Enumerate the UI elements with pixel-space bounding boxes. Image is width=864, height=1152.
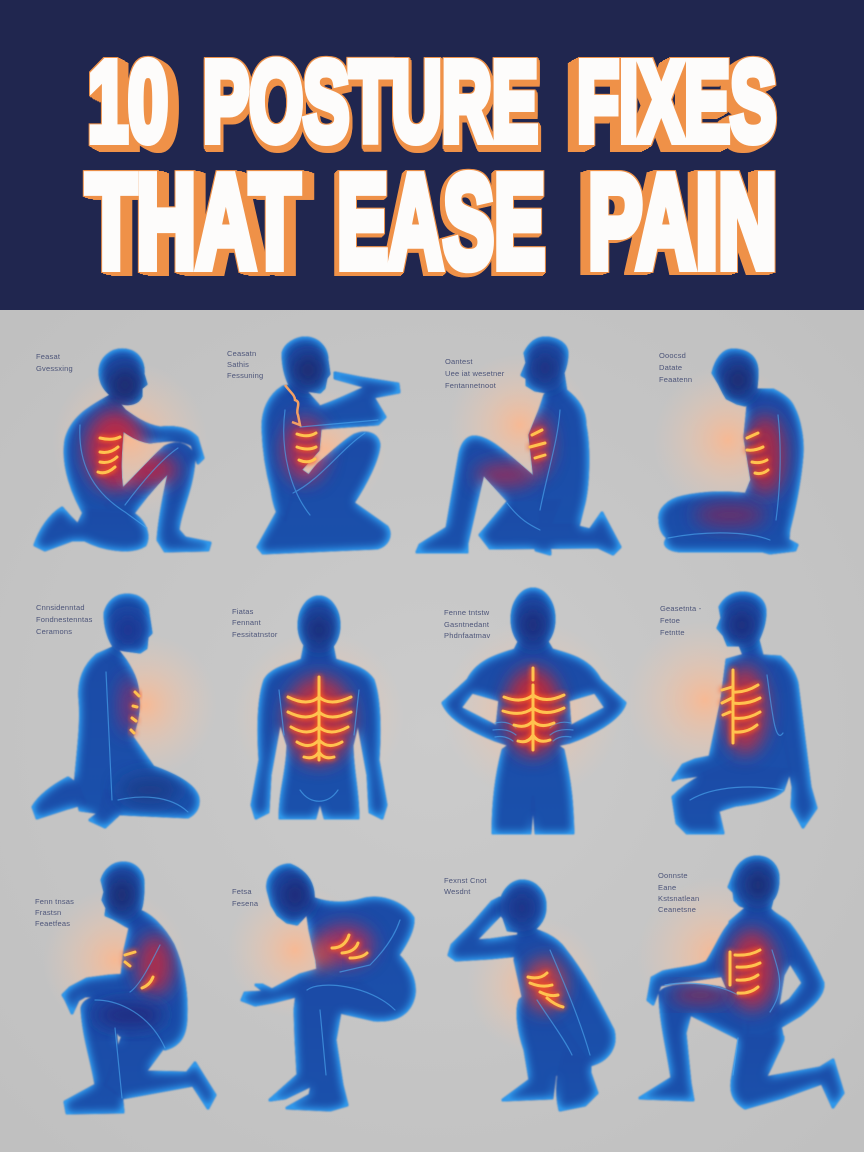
figure 9: lunging, hand on knee [35,863,215,1113]
body 9 [63,863,215,1113]
glow 6 [234,630,404,800]
title: POSTURE [203,38,538,164]
glow 10 [227,882,363,1018]
body 3 [417,338,620,554]
label 12: Ceanetsne [658,905,696,914]
figure 8: seated, three-quarter view [625,593,816,833]
label 8: Fetntte [660,628,685,637]
figure 5: kneeling, side view [33,595,217,827]
body 11 [449,881,614,1110]
glow 3 [448,353,592,497]
glow 5 [73,633,217,777]
limb lines 6 [279,690,359,801]
label 12: Eane [658,883,676,892]
label 8: Fetoe [660,616,680,625]
shading 9 [95,875,173,1027]
shading 12 [670,867,776,1010]
label 3: Oantest [445,357,473,366]
label 3: Uee iat wesetner [445,369,505,378]
label 8: Geasetnta - [660,604,701,613]
label 4: Ooocsd [659,351,686,360]
header band [0,0,864,310]
label 5: Ceramons [36,627,72,636]
glow 1 [52,362,208,518]
title [86,38,777,295]
label 10: Fesena [232,899,259,908]
shading 11 [508,890,565,1011]
ribs 3 [530,430,545,458]
title: 10 [88,38,168,164]
body 6 [252,597,386,818]
label 9: Feaetfeas [35,919,70,928]
limb lines 4 [668,415,780,540]
label 5: Fondnestenntas [36,615,93,624]
body 2 [258,338,399,553]
shading 3 [475,350,560,487]
body 10 [242,865,414,1110]
title: EASE [337,148,545,295]
label 2: Sathis [227,360,249,369]
ribs 1 [98,437,120,473]
glow 2 [263,388,387,512]
ribs 5 [131,692,139,733]
limb lines 12 [665,950,780,1075]
label 6: Fennant [232,618,262,627]
glow 12 [637,877,793,1033]
label 3: Fentannetnoot [445,381,497,390]
body 7 [443,589,625,833]
label 9: Frastsn [35,908,61,917]
lower panel background [0,310,864,1152]
ribs 10 [332,935,367,958]
figure 7: standing, hands on hips [443,589,625,833]
label 6: Fiatas [232,607,254,616]
label 2: Fessuning [227,371,263,380]
figure 4: seated, head bowed [653,350,803,553]
label 5: Cnnsidenntad [36,603,85,612]
ribs 4 [747,433,768,474]
figure 11: crouching, hand to head [444,876,614,1110]
label 1: Feasat [36,352,60,361]
ribs 7 [503,668,564,750]
body 12 [640,857,843,1108]
label 11: Wesdnt [444,887,471,896]
ribs 11 [528,973,563,1007]
body 5 [33,595,198,827]
limb lines 9 [95,945,165,1098]
label 12: Kstsnatlean [658,894,699,903]
ribs 9 [125,952,153,988]
label 2: Ceasatn [227,349,256,358]
figure 6: standing, front view [232,597,404,818]
label 7: Phdnfaatmav [444,631,490,640]
label 10: Fetsa [232,887,252,896]
label 7: Gasntnedant [444,620,490,629]
glow 8 [625,620,785,780]
ribs 8 [722,670,760,743]
body 1 [35,350,210,551]
shading 10 [279,875,373,969]
limb lines 2 [284,410,378,515]
shading 5 [113,612,180,804]
label 4: Feaatenn [659,375,692,384]
label 1: Gvessxing [36,364,73,373]
label 12: Oonnste [658,871,688,880]
limb lines 3 [507,410,560,530]
limb lines 8 [690,675,783,800]
title: THAT [86,148,300,295]
body 4 [660,350,802,553]
body 8 [673,593,816,833]
limb lines 10 [307,920,400,1075]
glow 4 [653,365,803,515]
limb lines 11 [537,950,590,1055]
shoulder joint outline 2 [285,385,300,425]
figure 1: kneeling, head bowed [35,350,210,551]
shading 6 [285,612,353,764]
figure 2: kneeling, arms crossed [227,338,399,553]
label 4: Datate [659,363,682,372]
figure 12: lunging, hand on thigh [637,857,843,1108]
limb lines 1 [80,425,178,528]
ribs 6 [288,677,351,760]
limb lines 5 [106,672,188,812]
label 11: Fexnst Cnot [444,876,487,885]
glow 7 [443,620,623,800]
ribs 2 [297,433,316,462]
hands 7 [493,722,573,741]
glow 11 [467,917,603,1053]
shading 4 [694,362,785,527]
shading 1 [85,365,178,490]
shading 8 [723,607,767,754]
ribs 12 [730,950,760,993]
label 6: Fessitatnstor [232,630,278,639]
label 9: Fenn tnsas [35,897,74,906]
figure 10: bending forward, seated [227,865,414,1110]
shading 2 [283,352,327,482]
shading 7 [505,605,561,756]
glow 9 [43,888,187,1032]
figure 3: seated, knee raised [417,338,620,554]
label 7: Fenne tntstw [444,608,489,617]
